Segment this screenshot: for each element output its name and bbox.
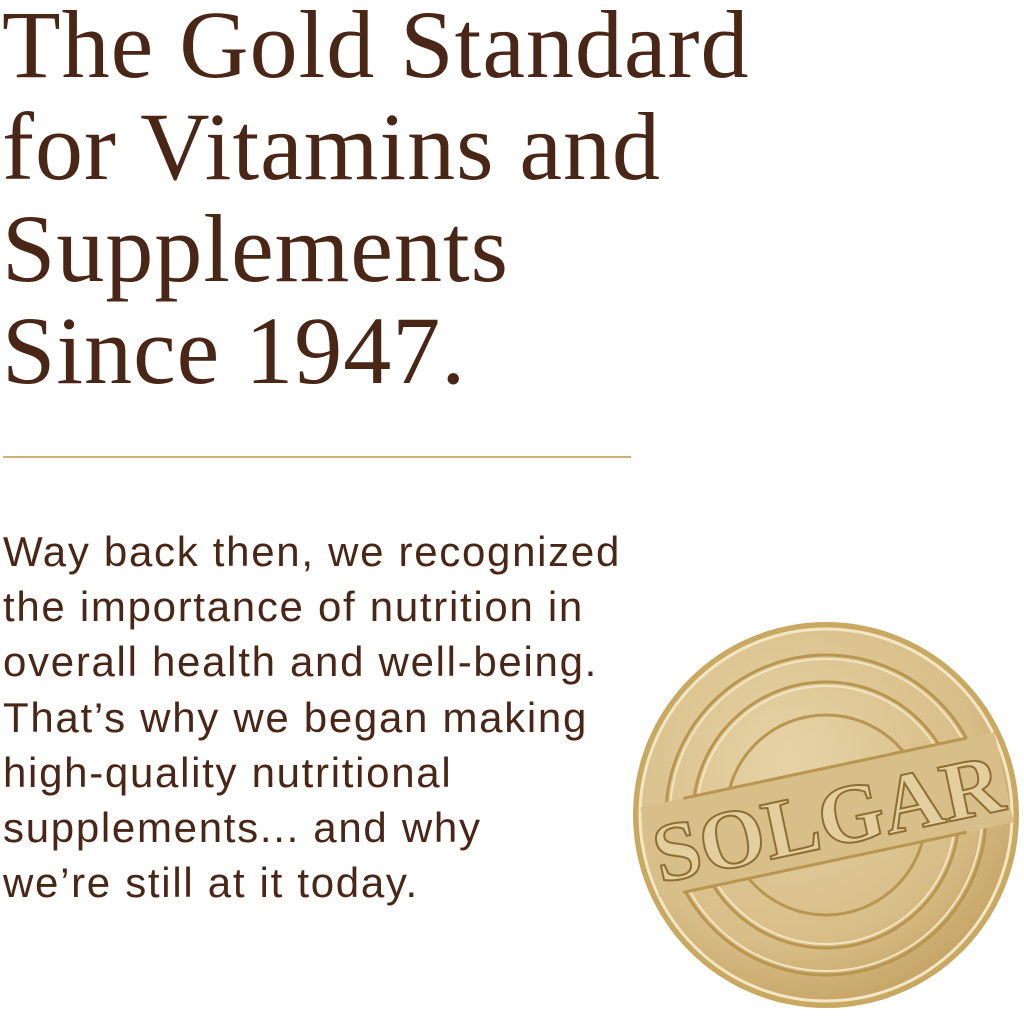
title [2, 0, 750, 404]
title: Supplements [2, 195, 509, 302]
body text: That’s why we began making [3, 694, 588, 741]
body text: Way back then, we recognized [3, 528, 621, 575]
icon: Solgar gold coin: SOLGAR [645, 737, 1012, 902]
body text [3, 528, 621, 906]
body text: supplements... and why [3, 804, 482, 851]
body text: the importance of nutrition in [3, 583, 584, 630]
title: Since 1947. [2, 297, 466, 404]
title: for Vitamins and [2, 93, 661, 200]
body text: we’re still at it today. [3, 859, 419, 906]
body text: overall health and well-being. [3, 638, 598, 685]
body text: high-quality nutritional [3, 749, 452, 796]
icon: Solgar gold coin [633, 622, 1019, 1008]
